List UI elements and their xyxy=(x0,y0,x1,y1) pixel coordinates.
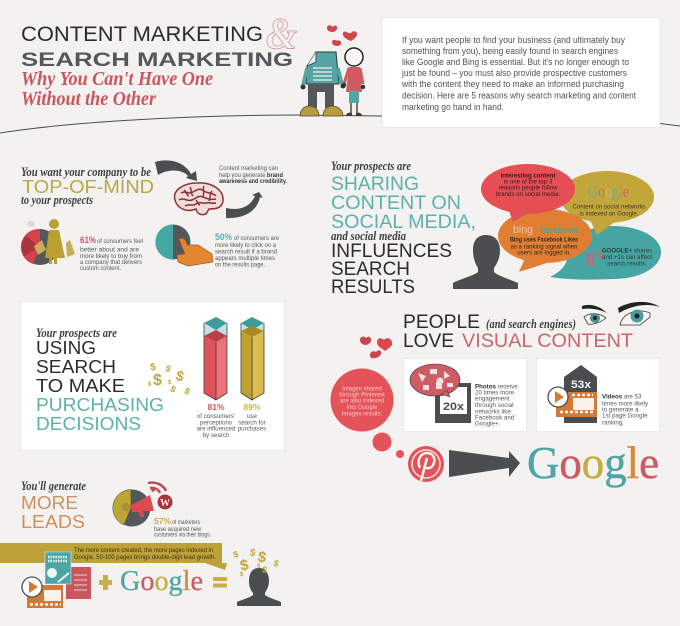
stat: 61%: a company that delivers xyxy=(80,259,142,266)
text: videos: ranking. xyxy=(602,420,624,426)
heading: people love visual content: VISUAL CONTENT xyxy=(462,331,633,352)
logo: google: Google xyxy=(527,437,659,488)
icon: person with dollars: $ xyxy=(240,572,244,578)
heading: using search to make purchasing decisions: USING xyxy=(36,337,96,358)
text: photos: Google+. xyxy=(475,420,501,428)
bar: 89% xyxy=(241,317,264,400)
heading: using search to make purchasing decisions: PURCHASING xyxy=(36,394,164,415)
heading: people love visual content: LOVE xyxy=(403,331,454,352)
text: photos: engagement xyxy=(475,396,510,402)
pie chart: 61% with shopper xyxy=(21,219,75,265)
bubble: interesting content: Interesting content xyxy=(501,172,555,180)
icon: dollar signs: $ xyxy=(165,363,172,374)
stat: 50%: on the results page. xyxy=(215,262,265,268)
callout: pinterest thought bubble: into Google xyxy=(347,405,378,411)
heading: sharing content on social media: RESULTS xyxy=(331,277,415,298)
icon: equals xyxy=(213,577,227,588)
icon: teal report xyxy=(45,552,71,584)
panel: using search xyxy=(20,302,284,450)
banner: lead growth xyxy=(0,543,227,570)
stat: 57% xyxy=(154,516,211,538)
icon: dollar signs: $ xyxy=(174,367,186,385)
stat: 50%: search result if a brand xyxy=(215,248,278,256)
bar: 81% xyxy=(204,317,227,400)
label: 81%: by search xyxy=(203,432,230,439)
label: 89%: 89% xyxy=(243,402,261,412)
pie chart: 57% with megaphone xyxy=(113,483,172,526)
icon: plus xyxy=(99,575,112,590)
icon: dollar signs: $ xyxy=(149,362,157,374)
bubble: google plus: search results. xyxy=(607,260,647,268)
bubble: google index: Content on social networks xyxy=(572,204,646,210)
heading: sharing content on social media: and social media xyxy=(331,228,406,243)
heading: sharing content on social media: INFLUENCES xyxy=(331,241,452,262)
heading: top-of-mind: You want your company to be xyxy=(21,164,151,179)
text: photos: 20 times more xyxy=(475,390,515,396)
icon: person with dollars: $ xyxy=(261,564,268,575)
panel: introduction: marketing go hand in hand. xyxy=(402,102,504,113)
panel: introduction: just be found – you must also provide prospective customers xyxy=(401,68,627,79)
heading: people love visual content: (and search engines) xyxy=(486,317,576,331)
label: 81% xyxy=(197,402,236,439)
icon: person with dollars: $ xyxy=(256,548,268,567)
bubble: interesting content: reasons people follow xyxy=(499,184,558,192)
stat: 61%: better about and are xyxy=(80,246,140,254)
callout: brand awareness: help you generate brand xyxy=(219,172,283,179)
heading: using search to make purchasing decisions: Your prospects are xyxy=(36,325,117,340)
stat: 50%: 50% xyxy=(215,232,232,243)
title: SEARCH MARKETING xyxy=(21,49,293,71)
icon: pointer hand xyxy=(177,238,213,266)
label: 89%: search for xyxy=(238,420,266,426)
illustration: document man and woman in love xyxy=(300,25,365,116)
icon: dollar signs: $ xyxy=(169,384,178,395)
bubble: google plus: GOOGLE+ shares xyxy=(602,248,652,254)
bubble: google index: is indexed on Google. xyxy=(580,210,639,218)
bubble: google index xyxy=(560,171,654,235)
text: videos: Videos are 53 xyxy=(602,394,642,400)
label: 81%: of consumers' xyxy=(197,413,235,420)
panel: introduction: If you want people to find your business (and ultimately buy xyxy=(402,35,625,46)
label: 81%: are influenced xyxy=(197,426,236,432)
icon: person with dollars: $ xyxy=(257,564,261,570)
logo: google small: Google xyxy=(120,565,203,597)
arrow: pinterest to google xyxy=(449,450,520,477)
icon: person with dollars: $ xyxy=(272,558,280,569)
banner: lead growth: Google. 50-100 pages brings double-digit lead growth. xyxy=(74,554,216,561)
text: photos xyxy=(475,384,518,428)
callout: brand awareness: awareness and credibility. xyxy=(219,178,287,185)
heading: people love visual content: PEOPLE xyxy=(403,312,480,333)
text: videos: times more likely xyxy=(602,400,649,408)
arrow: to brain xyxy=(155,160,197,181)
callout: pinterest thought bubble: Images results. xyxy=(342,412,383,418)
callout: pinterest thought bubble: are also indexed xyxy=(340,398,384,404)
stat: 57%: have acquired new xyxy=(154,526,201,533)
stat: 50%: more likely to click on a xyxy=(215,242,277,249)
icon: red document xyxy=(66,567,91,599)
stat: 61%: more likely to buy from xyxy=(80,253,142,260)
speech bubbles xyxy=(481,164,661,280)
icon: person with dollars: $ xyxy=(232,549,240,560)
icon: person silhouette xyxy=(453,235,518,289)
heading: sharing content on social media: SEARCH xyxy=(331,259,410,280)
bubble: interesting content xyxy=(481,164,575,222)
bubble: interesting content: brands on social media. xyxy=(496,191,560,198)
stat: 61% xyxy=(80,235,143,272)
text: videos xyxy=(602,394,649,426)
stat: 61%: of consumers feel xyxy=(97,238,143,245)
icon: dollar signs: $ xyxy=(153,372,162,389)
panel: videos xyxy=(536,358,660,432)
icon: dollar signs: $ xyxy=(148,382,152,388)
icon: shopper xyxy=(34,219,75,264)
heading: top-of-mind xyxy=(21,164,154,207)
label: 89%: use xyxy=(247,413,258,420)
icon: wordpress: W xyxy=(160,498,170,509)
heading: sharing content on social media: Your prospects are xyxy=(331,158,411,173)
title: & xyxy=(266,9,297,58)
stat: 50%: of consumers are xyxy=(234,235,280,242)
icon: megaphone xyxy=(130,495,154,517)
text: videos: to generate a xyxy=(602,406,639,414)
heading: people love visual content xyxy=(403,312,633,352)
heading: using search to make purchasing decisions: TO MAKE xyxy=(36,375,125,396)
title xyxy=(21,9,297,110)
icon: pinterest logo xyxy=(408,446,444,482)
arrow: from brain xyxy=(226,192,263,218)
banner: lead growth: The more content created, the more pages indexed in xyxy=(74,547,214,554)
bubble: bing and facebook: bing xyxy=(513,224,533,236)
stat: 57%: customers via their blogs. xyxy=(154,532,211,538)
bubble: google plus: and +1s can affect xyxy=(602,254,652,261)
heading: using search to make purchasing decisions: DECISIONS xyxy=(36,413,141,434)
panel: introduction: like Google and Bing is essential. But it's no longer enough to xyxy=(402,57,629,68)
icon: dollar signs: $ xyxy=(183,386,192,397)
icon: person with dollars: $ xyxy=(239,556,251,575)
label: 89%: purchases xyxy=(238,426,266,432)
bubble: bing and facebook: as a ranking signal when xyxy=(510,244,578,250)
text: videos: 1st page Google xyxy=(602,412,648,420)
heading: more leads: LEADS xyxy=(21,511,85,532)
label: 81%: perceptions xyxy=(200,420,232,426)
heading: sharing content on social media: SOCIAL MEDIA, xyxy=(331,212,476,233)
icon: brain xyxy=(175,183,223,215)
panel: introduction: with the content they need to make an informed purchasing xyxy=(401,79,624,90)
text: photos: Photos receive xyxy=(475,384,518,390)
stat: 50% xyxy=(215,232,280,268)
icon: social speech bubble xyxy=(410,364,460,397)
heading: top-of-mind: TOP-OF-MIND xyxy=(22,177,154,197)
heading: more leads xyxy=(21,478,86,532)
icon: video badge: 53x xyxy=(571,379,592,391)
text: photos: Facebook and xyxy=(475,414,515,422)
icon: film with play button xyxy=(22,577,63,608)
heading: sharing content on social media: CONTENT ON xyxy=(331,193,461,214)
pie chart: 50% with pointer xyxy=(156,224,213,266)
title: CONTENT MARKETING xyxy=(21,23,263,46)
stat: 61%: 61% xyxy=(80,235,96,246)
heading: using search to make purchasing decisions: SEARCH xyxy=(36,356,116,377)
heading: sharing content on social media xyxy=(331,158,476,298)
heading: sharing content on social media: SHARING xyxy=(331,174,419,195)
panel: introduction: something from you), being easily found in search engines xyxy=(402,46,618,57)
bar chart: 81% and 89% xyxy=(204,317,264,400)
icon: hearts xyxy=(360,337,392,358)
title: Why You Can't Have One xyxy=(21,68,213,90)
stat: 57%: of marketers xyxy=(172,519,200,526)
stat: 50%: appears multiple times xyxy=(215,255,275,262)
callout: pinterest thought bubble xyxy=(330,368,404,458)
bubble: google plus xyxy=(550,226,661,280)
icon: eyes xyxy=(582,302,660,325)
bubble: bing and facebook: users are logged in. xyxy=(517,250,571,256)
icon: signal arcs xyxy=(148,483,166,493)
bubble: bing and facebook: Bing uses Facebook Likes xyxy=(510,236,579,244)
callout: brand awareness: Content marketing can xyxy=(219,165,279,172)
bubble: interesting content: is one of the top 3 xyxy=(504,178,553,186)
callout: pinterest thought bubble: through Pinterest xyxy=(339,392,385,398)
bubble: google index: Google xyxy=(588,182,629,201)
panel: introduction: decision. Here are 5 reasons why search marketing and content xyxy=(402,90,636,102)
panel: photos xyxy=(404,358,526,432)
bubble: bing and facebook xyxy=(498,209,592,272)
heading: more leads: You'll generate xyxy=(21,478,86,493)
label: 89% xyxy=(238,402,266,432)
heading: more leads: MORE xyxy=(21,492,78,513)
heading: using search to make purchasing decisions xyxy=(36,325,164,434)
callout: brand awareness xyxy=(219,165,287,185)
heading: top-of-mind: to your prospects xyxy=(21,192,93,207)
icon: person with dollars: $ xyxy=(249,547,257,559)
callout: pinterest thought bubble: Images shared xyxy=(342,386,382,392)
icon: dollar signs: $ xyxy=(168,380,172,386)
bubble: bing and facebook: facebook xyxy=(540,225,579,236)
label: 81%: 81% xyxy=(207,402,225,412)
panel: introduction xyxy=(382,18,660,128)
icon: photo frame: 20x xyxy=(443,401,465,413)
text: photos: networks like xyxy=(475,408,511,416)
title: Without the Other xyxy=(21,88,156,110)
stat: 61%: custom content. xyxy=(80,265,121,272)
text: photos: through social xyxy=(475,402,514,409)
icon: dollar signs xyxy=(148,362,192,397)
stat: 57%: 57% xyxy=(154,516,171,526)
icon: person with dollars xyxy=(232,547,281,606)
bubble: google plus: g+ xyxy=(586,246,606,267)
